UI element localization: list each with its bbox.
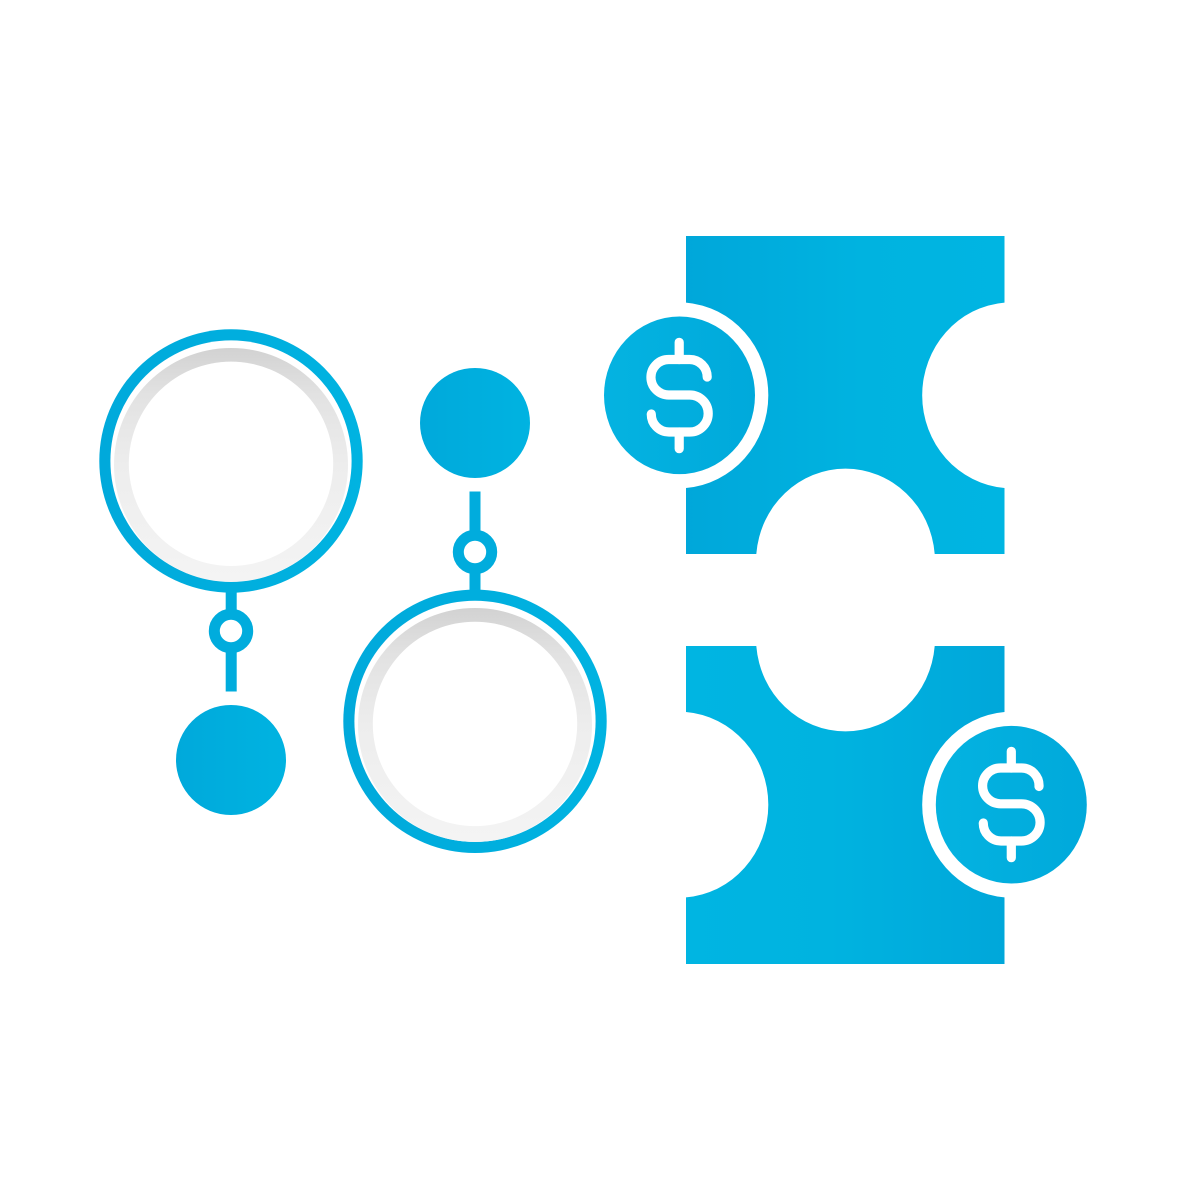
large outlined ring <box>99 329 363 593</box>
large outlined ring <box>343 590 607 853</box>
middle node: small circle with large ring below <box>343 368 607 853</box>
left node: large ring with small circle below <box>99 329 363 815</box>
icon: upper dollar coin <box>604 316 755 474</box>
connector stem with small ring <box>214 588 248 692</box>
panel: lower puzzle piece <box>686 646 1004 964</box>
connector stem with small ring <box>458 492 492 594</box>
solid circle <box>420 368 530 478</box>
panel: upper puzzle piece <box>686 236 1004 554</box>
solid circle <box>176 705 286 815</box>
icon: lower dollar coin <box>936 726 1087 884</box>
